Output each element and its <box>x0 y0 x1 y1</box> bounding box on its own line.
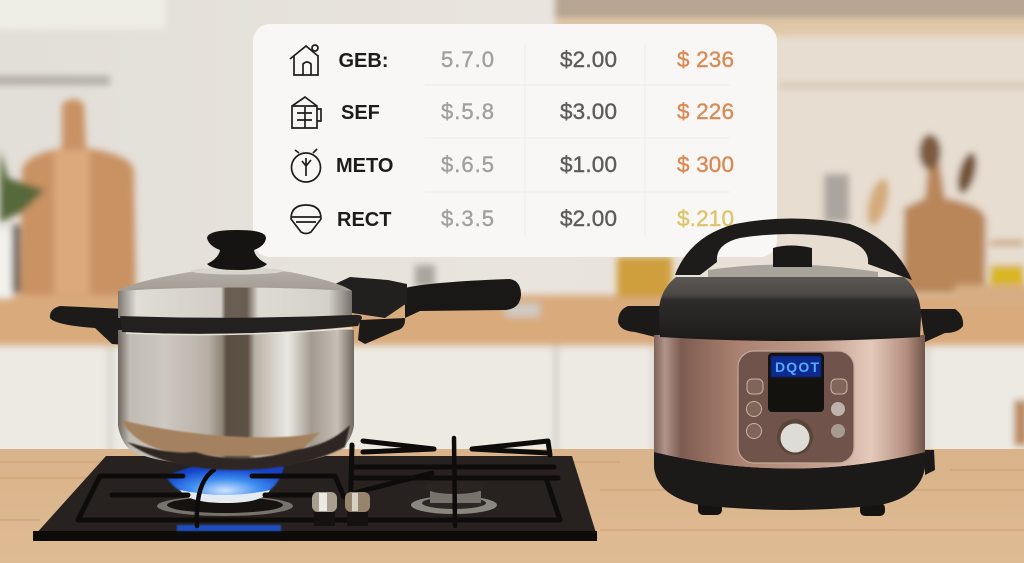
row label: RECT: RECT <box>337 209 391 231</box>
icon: stopwatch <box>292 149 320 182</box>
grates <box>78 438 560 526</box>
column 1 values: $.3.5 <box>441 206 494 231</box>
icon: bowl <box>291 205 321 234</box>
cooker base <box>654 452 925 510</box>
plant <box>0 150 45 222</box>
pot base reflection <box>121 420 320 456</box>
flame <box>166 462 284 500</box>
small latch <box>925 450 935 475</box>
gas stove <box>33 438 597 541</box>
lid handle arch <box>675 218 912 280</box>
column 1 values <box>441 47 494 231</box>
icon: appliance <box>292 97 321 128</box>
cooker knob <box>773 246 812 267</box>
electric pressure cooker <box>618 218 963 516</box>
burner ring left <box>157 496 293 516</box>
column 1 values: $.5.8 <box>441 99 494 124</box>
column 2 values: $2.00 <box>560 206 617 231</box>
column 2 values: $2.00 <box>560 47 617 72</box>
copper body <box>654 335 925 468</box>
column 2 values: $1.00 <box>560 152 617 177</box>
column 2 values <box>560 47 617 231</box>
icon: house <box>290 45 318 75</box>
display screen <box>768 353 824 412</box>
flame reflection <box>177 525 281 531</box>
panel buttons <box>746 379 847 438</box>
wooden table <box>0 449 1024 563</box>
column 2 values: $3.00 <box>560 99 617 124</box>
stovetop pressure cooker <box>50 230 521 470</box>
pot rim band <box>120 315 362 334</box>
blurred utensils right <box>903 140 986 293</box>
column 3 values: $.210 <box>677 206 734 231</box>
cutting board left <box>20 99 136 295</box>
column 1 values: $.6.5 <box>441 152 494 177</box>
burner right <box>411 480 497 514</box>
column 3 values <box>677 47 734 231</box>
control panel <box>738 351 854 463</box>
dial <box>777 419 813 455</box>
row label: SEF: SEF <box>341 102 380 124</box>
pot lid knob <box>191 230 283 274</box>
column 3 values: $ 300 <box>677 152 734 177</box>
column 3 values: $ 226 <box>677 99 734 124</box>
row label: GEB: GEB: <box>338 50 388 72</box>
panel: cost comparison table <box>253 24 777 257</box>
side handles <box>618 306 963 342</box>
cooker feet <box>698 500 885 516</box>
column 3 values: $ 236 <box>677 47 734 72</box>
pot handle right <box>335 277 521 344</box>
black lid <box>659 277 921 341</box>
display text: DQOT <box>775 359 819 375</box>
pot body <box>118 330 354 466</box>
pot side handle left <box>50 306 127 345</box>
pot lid <box>118 269 352 318</box>
lid glass <box>708 264 878 280</box>
column 1 values: 5.7.0 <box>441 47 494 72</box>
row label: METO: METO <box>336 155 393 177</box>
control knobs <box>312 492 370 526</box>
